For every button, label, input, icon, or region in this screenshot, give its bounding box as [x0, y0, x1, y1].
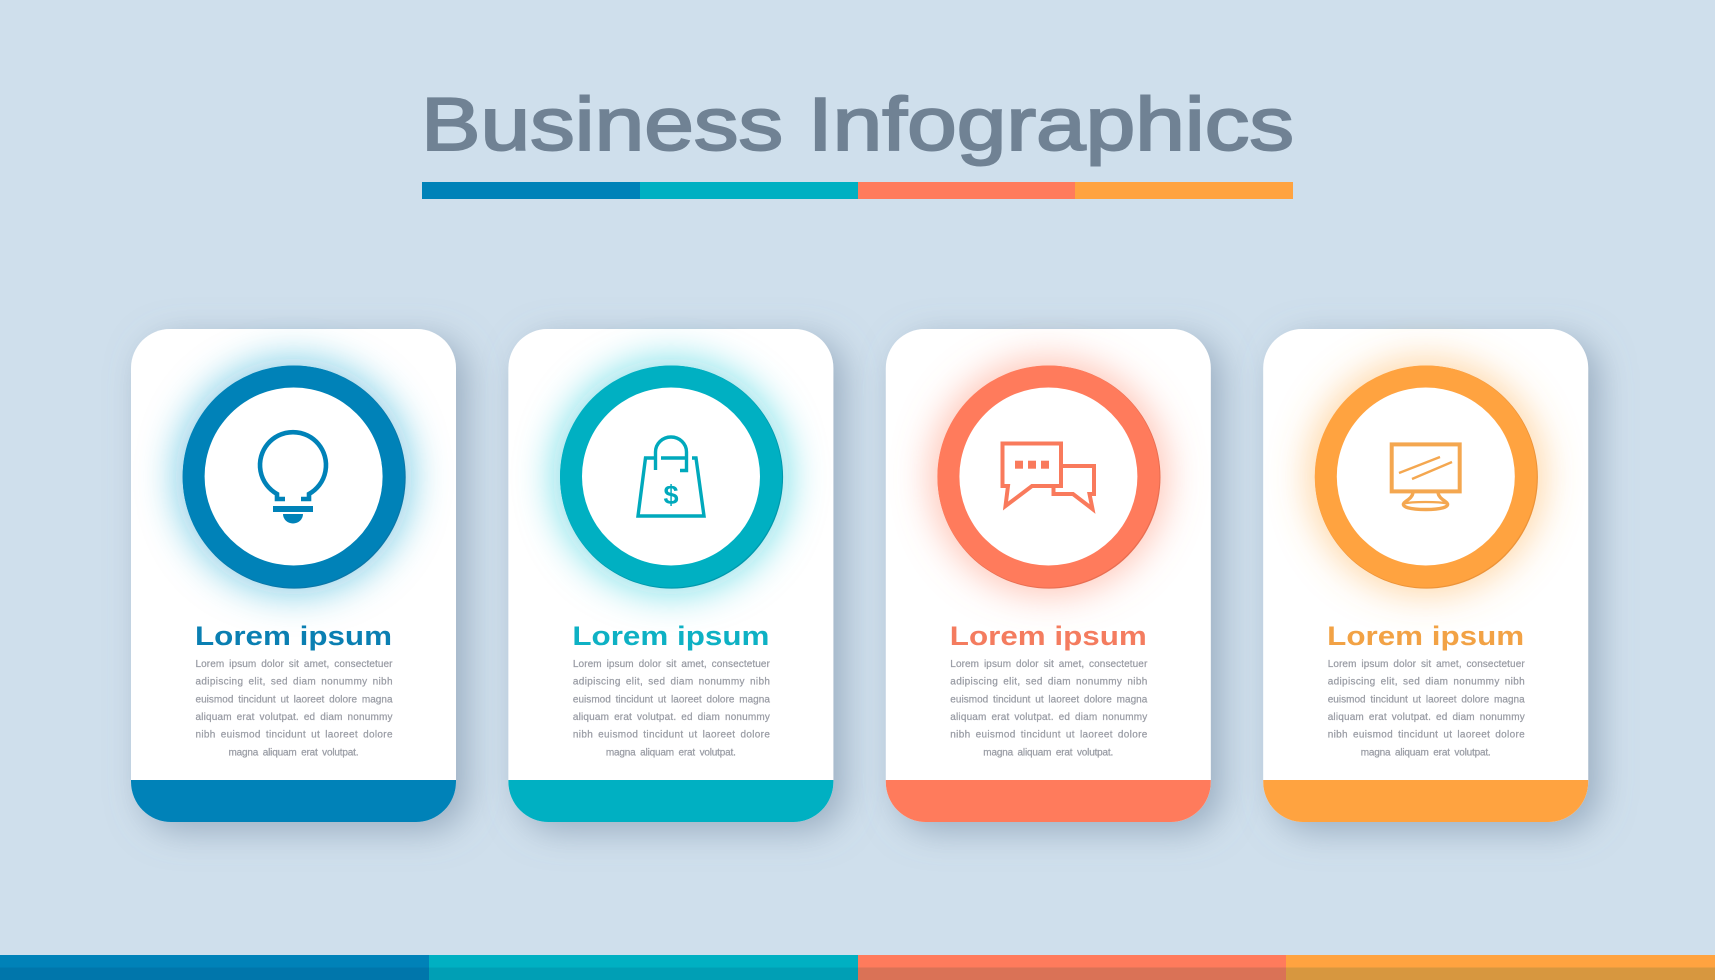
card 3 body text: magna aliquam erat volutpat. [983, 747, 1113, 758]
title: Business Infographics [421, 82, 1294, 166]
card 1 body text: magna aliquam erat volutpat. [228, 747, 358, 758]
bottom colour bar [0, 955, 1715, 980]
panel: card 2 [508, 329, 833, 822]
card 2 footer band [508, 780, 833, 822]
card 1 footer band [131, 780, 456, 822]
card 4 body text: euismod tincidunt ut laoreet dolore magna [1328, 694, 1525, 705]
panel: card 3 [886, 329, 1211, 822]
card 1 body text: aliquam erat volutpat. ed diam nonummy [196, 712, 392, 723]
title underline [422, 182, 1293, 199]
icon: computer monitor [1392, 444, 1460, 510]
card 1 body text [196, 659, 393, 758]
card 4 body text: Lorem ipsum dolor sit amet, consectetuer [1328, 659, 1525, 670]
card 4 footer band [1263, 780, 1588, 822]
card 3 body text: Lorem ipsum dolor sit amet, consectetuer [950, 659, 1148, 670]
card 2 body text: aliquam erat volutpat. ed diam nonummy [573, 712, 770, 723]
panel: card 4 [1263, 329, 1588, 822]
card 3 body text: adipiscing elit, sed diam nonummy nibh [950, 677, 1147, 688]
card 4 body text: magna aliquam erat volutpat. [1361, 747, 1491, 758]
card 2 body text: Lorem ipsum dolor sit amet, consectetuer [573, 659, 771, 670]
card 3 body text [950, 659, 1148, 758]
card 3 body text: euismod tincidunt ut laoreet dolore magna [950, 694, 1148, 705]
card 3 heading: Lorem ipsum [950, 621, 1147, 651]
card 1 body text: Lorem ipsum dolor sit amet, consectetuer [196, 659, 393, 670]
card 2 body text: nibh euismod tincidunt ut laoreet dolore [573, 730, 770, 741]
card 2 body text [573, 659, 771, 758]
card 1 body text: nibh euismod tincidunt ut laoreet dolore [196, 730, 393, 741]
card 2 circle [553, 358, 789, 594]
card 4 body text [1328, 659, 1525, 758]
card 3 body text: nibh euismod tincidunt ut laoreet dolore [950, 730, 1148, 741]
card 3 footer band [886, 780, 1211, 822]
card 3 circle [930, 358, 1166, 594]
card 2 body text: euismod tincidunt ut laoreet dolore magna [573, 694, 770, 705]
card 2 body text: magna aliquam erat volutpat. [606, 747, 736, 758]
card 4 body text: adipiscing elit, sed diam nonummy nibh [1328, 677, 1525, 688]
icon: shopping bag [638, 437, 704, 516]
card 4 circle [1308, 358, 1544, 594]
card 1 body text: adipiscing elit, sed diam nonummy nibh [196, 677, 392, 688]
card 2 body text: adipiscing elit, sed diam nonummy nibh [573, 677, 770, 688]
card 1 body text: euismod tincidunt ut laoreet dolore magna [196, 694, 393, 705]
icon: light bulb [260, 432, 326, 524]
icon: shopping bag: $ [663, 480, 679, 510]
card 4 heading: Lorem ipsum [1327, 621, 1524, 651]
card 1 heading: Lorem ipsum [195, 621, 392, 651]
card 3 body text: aliquam erat volutpat. ed diam nonummy [950, 712, 1147, 723]
card 1 circle [176, 358, 412, 594]
card 2 heading: Lorem ipsum [572, 621, 769, 651]
card 4 body text: nibh euismod tincidunt ut laoreet dolore [1328, 730, 1525, 741]
icon: chat bubbles [1002, 444, 1094, 509]
panel: card 1 [131, 329, 456, 822]
card 4 body text: aliquam erat volutpat. ed diam nonummy [1328, 712, 1525, 723]
